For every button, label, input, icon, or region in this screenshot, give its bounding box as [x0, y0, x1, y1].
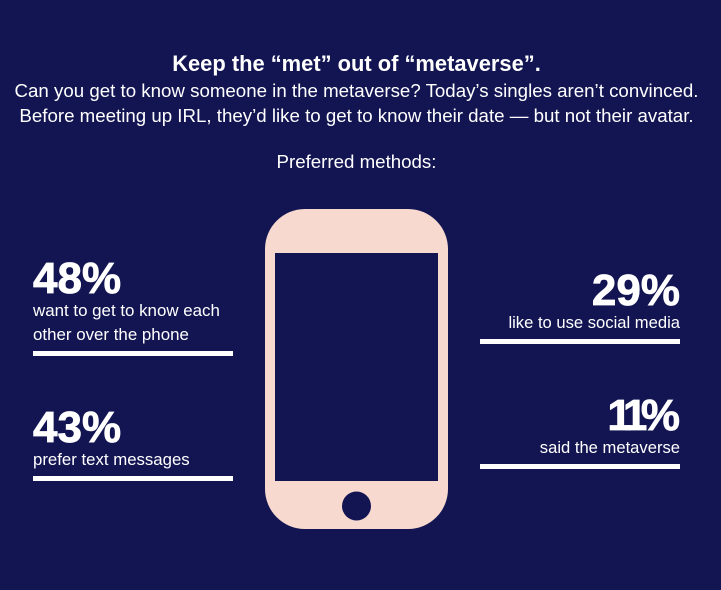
stat: social media 29%	[480, 266, 680, 344]
stat: text messages 43%: prefer text messages	[33, 450, 190, 469]
intro text	[15, 80, 698, 126]
subheading: Preferred methods:	[277, 151, 436, 172]
stat: metaverse 11%: said the metaverse	[540, 438, 680, 457]
stat: phone 48%: other over the phone	[33, 325, 189, 344]
icon: phone	[265, 209, 448, 529]
stat: metaverse 11%	[480, 391, 680, 469]
title: Keep the “met” out of “metaverse”.	[172, 51, 541, 76]
stat: text messages 43%	[33, 403, 233, 481]
intro text: Before meeting up IRL, they’d like to get to know their date — but not their avatar.	[19, 105, 694, 126]
stat: phone 48%: 48%	[33, 254, 121, 303]
stat: text messages 43%: 43%	[33, 403, 121, 452]
intro text: Can you get to know someone in the metaverse? Today’s singles aren’t convinced.	[15, 80, 698, 101]
stat: social media 29%: 29%	[592, 266, 680, 315]
stat: metaverse 11%: 11%	[607, 391, 680, 440]
stat: social media 29%: like to use social media	[508, 313, 680, 332]
stat: phone 48%: want to get to know each	[33, 301, 220, 320]
stat: phone 48%	[33, 254, 233, 356]
